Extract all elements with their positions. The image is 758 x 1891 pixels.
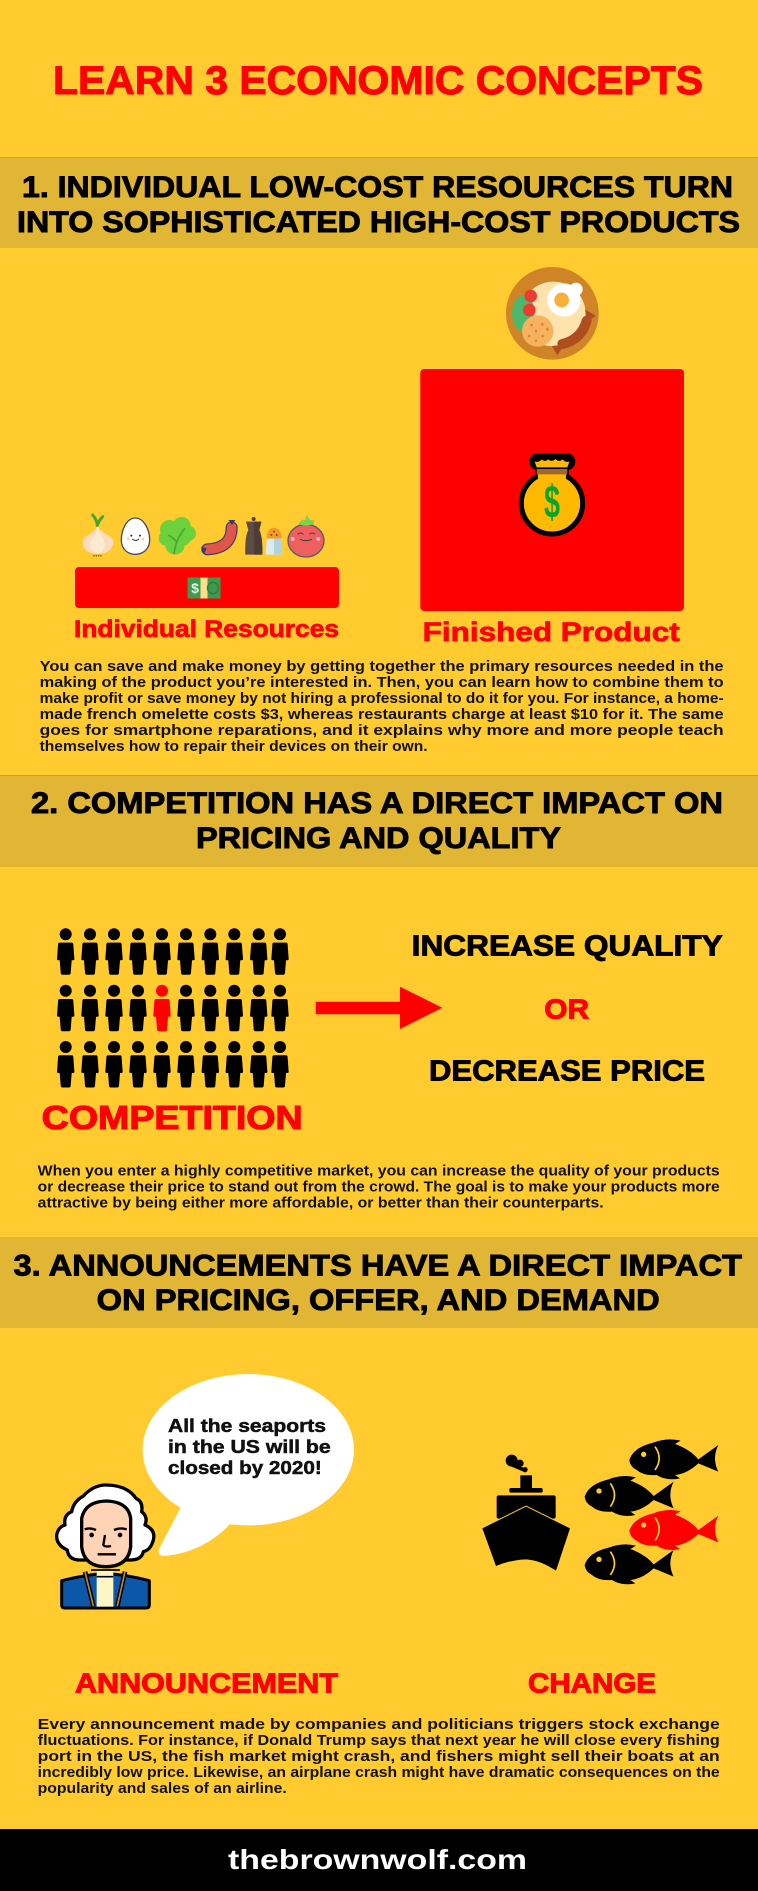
text block: section 3 body: Every announcement made by companies and politicians triggers stock exchange bbox=[38, 1716, 720, 1733]
icon: school of fish bbox=[585, 1439, 718, 1584]
text block: section 2 body: or decrease their price to stand out from the crowd. The goal is to make your products more bbox=[38, 1179, 720, 1196]
icon: ship bbox=[482, 1455, 570, 1571]
callout: speech bubble: closed by 2020! bbox=[168, 1458, 322, 1478]
icon: egg bbox=[121, 518, 150, 554]
text block: section 1 body: You can save and make money by getting together the primary resources needed in the bbox=[40, 658, 724, 675]
label: decrease price: DECREASE PRICE bbox=[429, 1056, 705, 1088]
label: individual resources: Individual Resources bbox=[74, 616, 339, 643]
icon: finished dish on plate bbox=[506, 267, 599, 360]
text block: section 3 body bbox=[38, 1716, 720, 1797]
section 2 heading band: 2. COMPETITION HAS A DIRECT IMPACT ON bbox=[31, 787, 723, 820]
section 3 heading band: ON PRICING, OFFER, AND DEMAND bbox=[97, 1284, 660, 1317]
icons: individual ingredients bbox=[83, 515, 324, 557]
text block: section 1 body: making of the product you’re interested in. Then, you can learn how to combine them to bbox=[40, 674, 724, 691]
text block: section 1 body: goes for smartphone reparations, and it explains why more and more people teach bbox=[40, 722, 724, 739]
icon: sausage bbox=[201, 520, 235, 554]
text block: section 3 body: port in the US, the fish market might crash, and fishers might sell their boats at an bbox=[38, 1748, 720, 1765]
section 3 heading band bbox=[0, 1237, 758, 1328]
label: announcement: ANNOUNCEMENT bbox=[75, 1668, 338, 1699]
chart: crowd of competitors bbox=[57, 928, 289, 1088]
icon: pepper mill bbox=[245, 517, 262, 555]
label: finished product: Finished Product bbox=[423, 617, 680, 647]
text block: section 3 body: incredibly low price. Likewise, an airplane crash might have dramatic consequences on the bbox=[38, 1764, 720, 1781]
callout: speech bubble: in the US will be bbox=[168, 1437, 331, 1457]
text block: section 3 body: popularity and sales of an airline. bbox=[38, 1780, 287, 1797]
label: increase quality: INCREASE QUALITY bbox=[412, 931, 723, 963]
footer band: thebrownwolf.com bbox=[228, 1844, 527, 1875]
footer band bbox=[0, 1829, 758, 1891]
panel: individual resources bar bbox=[75, 567, 339, 608]
icon: salt shaker bbox=[266, 528, 282, 555]
section 1 heading band: INTO SOPHISTICATED HIGH-COST PRODUCTS bbox=[17, 206, 740, 239]
icon: man in powdered wig bbox=[57, 1485, 154, 1608]
text block: section 2 body: attractive by being either more affordable, or better than their counterparts. bbox=[38, 1195, 604, 1212]
icon: onion bbox=[83, 515, 113, 556]
label: change: CHANGE bbox=[528, 1668, 656, 1699]
text block: section 1 body: make profit or save money by not hiring a professional to do it for you. For instance, a home- bbox=[40, 690, 724, 707]
icon: highlighted red person bbox=[153, 985, 171, 1031]
text block: section 1 body bbox=[40, 658, 724, 755]
title: LEARN 3 ECONOMIC CONCEPTS bbox=[53, 59, 703, 103]
text block: section 1 body: themselves how to repair their devices on their own. bbox=[40, 738, 428, 755]
label: competition: COMPETITION bbox=[42, 1099, 303, 1136]
callout: speech bubble: All the seaports bbox=[168, 1416, 326, 1436]
section 3 heading band: 3. ANNOUNCEMENTS HAVE A DIRECT IMPACT bbox=[14, 1250, 742, 1283]
section 1 heading band: 1. INDIVIDUAL LOW-COST RESOURCES TURN bbox=[22, 171, 733, 204]
arrow bbox=[316, 987, 442, 1029]
text block: section 1 body: made french omelette costs $3, whereas restaurants charge at least $10 for it. The same bbox=[40, 706, 724, 723]
callout: speech bubble bbox=[143, 1374, 354, 1556]
icon: banknotes bbox=[188, 578, 220, 598]
text block: section 2 body: When you enter a highly competitive market, you can increase the quality of your products bbox=[38, 1163, 720, 1180]
icon: money bag: $ bbox=[544, 475, 560, 527]
text block: section 2 body bbox=[38, 1163, 720, 1212]
icon: lettuce bbox=[159, 517, 196, 555]
panel: finished product bar bbox=[420, 369, 684, 611]
label: or: OR bbox=[544, 993, 589, 1024]
text block: section 3 body: fluctuations. For instance, if Donald Trump says that next year he will close every fishing bbox=[38, 1732, 720, 1749]
icon: banknotes: $ bbox=[191, 580, 199, 596]
icon: money bag bbox=[521, 456, 583, 534]
section 1 heading band bbox=[0, 157, 758, 248]
icon: red fish bbox=[629, 1510, 718, 1550]
icon: tomato bbox=[288, 515, 324, 557]
section 2 heading band: PRICING AND QUALITY bbox=[196, 822, 561, 855]
section 2 heading band bbox=[0, 775, 758, 867]
